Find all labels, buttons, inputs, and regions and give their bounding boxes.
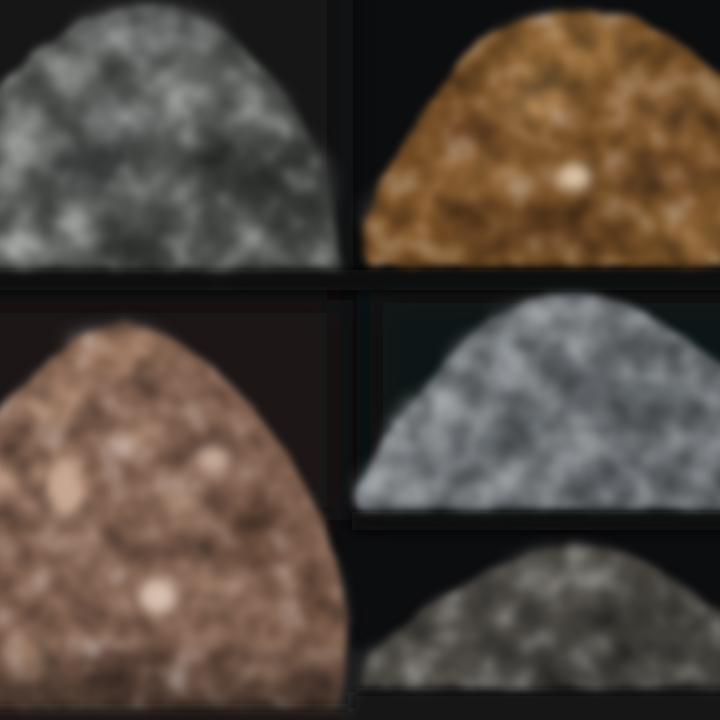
shelf shadows [0, 270, 720, 720]
heap: pale grey-blue mineral middle right [356, 292, 720, 512]
background [0, 0, 720, 511]
heap: pinkish brown mineral bottom left [0, 325, 360, 720]
heap: dark grey-brown mineral bottom right [360, 546, 720, 690]
heap: golden brown mineral top right [361, 11, 720, 268]
highlights: pale chips on the gold and pink heaps [51, 163, 591, 613]
heap: grey mineral top left [0, 6, 340, 278]
